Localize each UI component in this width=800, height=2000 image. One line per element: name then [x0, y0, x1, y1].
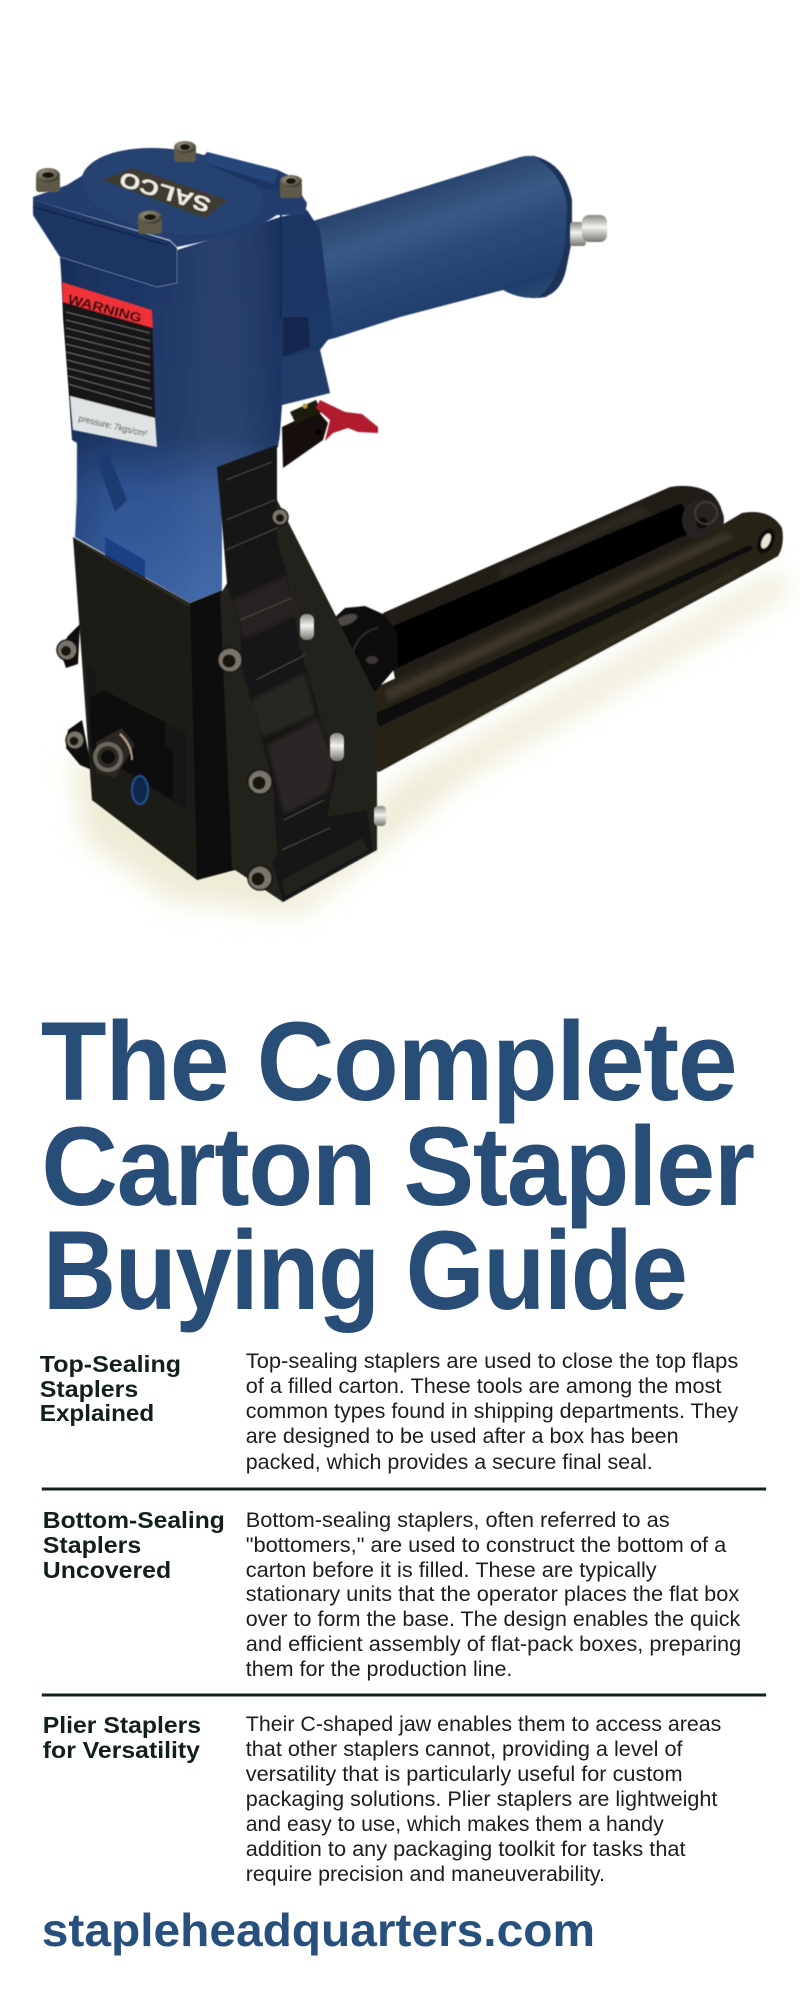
section: bottom-sealing staplers — [43, 1507, 741, 1681]
air connector — [570, 215, 607, 246]
warning label: pressure: 7kgs/cm² — [78, 413, 148, 439]
body text: bottom-sealing: Bottom-sealing staplers, often referred to as — [246, 1509, 670, 1532]
warning label: WARNING — [66, 291, 144, 326]
large front screw — [93, 728, 135, 778]
top cap — [33, 138, 307, 287]
body text: plier staplers: packaging solutions. Plier staplers are lightweight — [246, 1788, 718, 1811]
heading: top-sealing: Staplers — [40, 1376, 138, 1402]
heading: bottom-sealing: Staplers — [43, 1532, 141, 1558]
heading: plier staplers: Plier Staplers — [43, 1712, 201, 1738]
body text: top-sealing: Top-sealing staplers are used to close the top flaps — [246, 1350, 738, 1373]
title — [41, 999, 754, 1333]
black front box — [60, 537, 242, 880]
body text: top-sealing: common types found in shipping departments. They — [246, 1400, 739, 1423]
top cap: SALCO — [117, 167, 213, 216]
heading: top-sealing — [40, 1351, 181, 1426]
heading: bottom-sealing: Bottom-Sealing — [43, 1507, 225, 1533]
body text: top-sealing — [246, 1350, 739, 1474]
title: Buying Guide — [43, 1208, 687, 1333]
blue handle — [285, 155, 572, 350]
warning label — [62, 282, 157, 447]
heading: bottom-sealing: Uncovered — [43, 1557, 171, 1583]
heading: plier staplers — [43, 1712, 201, 1763]
body text: plier staplers: that other staplers cannot, providing a level of — [246, 1738, 683, 1761]
text layout — [40, 999, 766, 1956]
black rear plate and ribbed column — [217, 445, 377, 902]
section: plier staplers — [43, 1712, 721, 1886]
body text: plier staplers: Their C-shaped jaw enables them to access areas — [246, 1713, 721, 1736]
blue main body — [60, 205, 333, 603]
trigger — [282, 400, 378, 468]
body text: bottom-sealing: them for the production line. — [246, 1658, 512, 1681]
heading: plier staplers: for Versatility — [43, 1737, 200, 1763]
heading: top-sealing: Explained — [40, 1400, 154, 1426]
body text: top-sealing: packed, which provides a secure final seal. — [246, 1451, 653, 1474]
body text: plier staplers: and easy to use, which makes them a handy — [246, 1813, 664, 1836]
bolts — [36, 141, 386, 890]
body text: plier staplers: require precision and maneuverability. — [246, 1863, 605, 1886]
body text: top-sealing: are designed to be used after a box has been — [246, 1425, 679, 1448]
product photo: carton stapler — [33, 138, 790, 915]
body text: bottom-sealing: "bottomers," are used to construct the bottom of a — [246, 1534, 727, 1557]
body text: plier staplers: versatility that is particularly useful for custom — [246, 1763, 683, 1786]
arm assembly — [330, 486, 783, 772]
title: The Complete — [41, 999, 736, 1124]
body text: bottom-sealing: stationary units that the operator places the flat box — [246, 1583, 740, 1606]
body text: top-sealing: of a filled carton. These tools are among the most — [246, 1375, 722, 1398]
body text: bottom-sealing: carton before it is filled. These are typically — [246, 1559, 657, 1582]
body text: bottom-sealing: over to form the base. The design enables the quick — [246, 1608, 741, 1631]
body text: bottom-sealing — [246, 1509, 741, 1681]
section: top-sealing staplers — [40, 1350, 739, 1474]
heading: bottom-sealing — [43, 1507, 225, 1583]
title: Carton Stapler — [41, 1104, 754, 1229]
body text: plier staplers — [246, 1713, 721, 1886]
footer website: stapleheadquarters.com — [42, 1904, 595, 1956]
body text: bottom-sealing: and efficient assembly of flat-pack boxes, preparing — [246, 1633, 741, 1656]
body text: plier staplers: addition to any packaging toolkit for tasks that — [246, 1838, 686, 1861]
floor shadow — [70, 570, 790, 915]
heading: top-sealing: Top-Sealing — [40, 1351, 181, 1377]
